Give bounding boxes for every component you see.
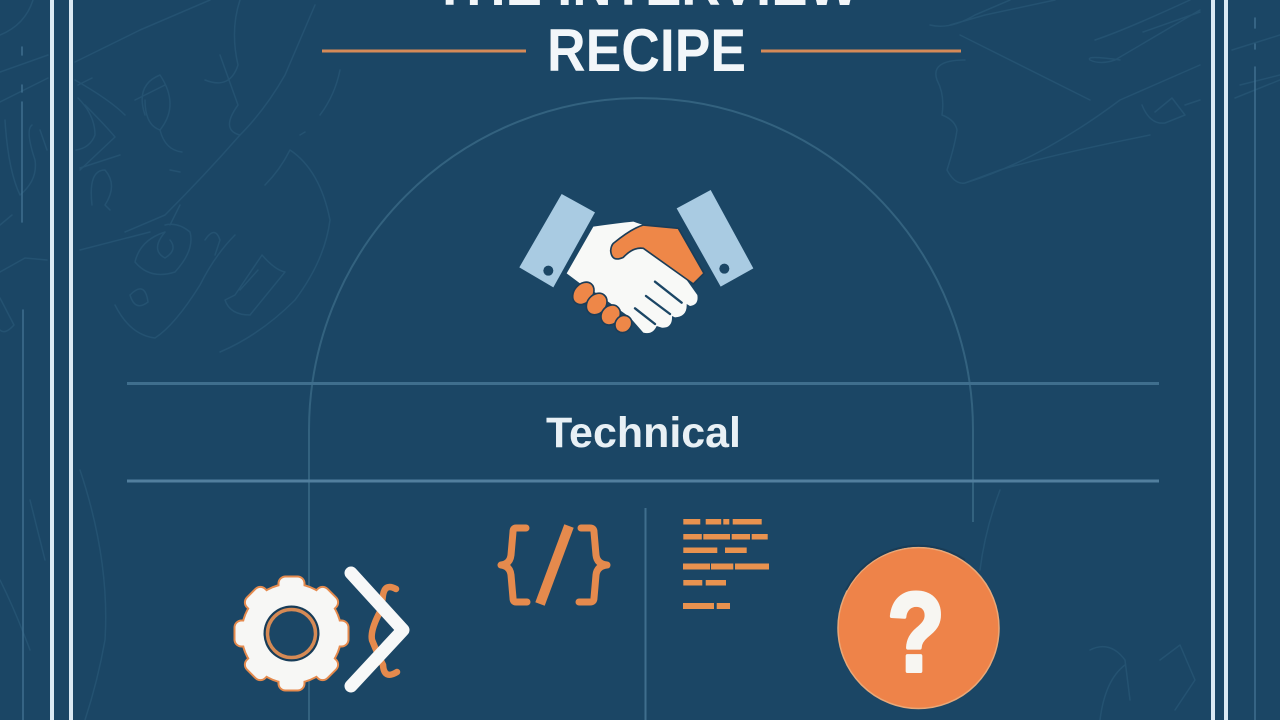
- icon: question mark circle: [838, 546, 999, 708]
- orange fingers: [568, 278, 635, 336]
- background arch: [309, 98, 973, 720]
- divider bottom: [127, 480, 1159, 482]
- left cuff: [519, 194, 595, 287]
- title: RECIPE: [547, 17, 746, 84]
- section heading: Technical: [546, 409, 741, 457]
- left dashed guide: [22, 47, 23, 720]
- icon: code lines: [683, 519, 769, 609]
- column divider: [644, 508, 646, 720]
- icon: gear: [236, 578, 348, 690]
- title rule: right: [761, 50, 961, 52]
- title rule: left: [322, 50, 526, 52]
- right dashed guide: [1254, 18, 1256, 720]
- icon: handshake: [519, 190, 753, 336]
- right cuff: [677, 190, 753, 287]
- divider top: [127, 382, 1159, 385]
- title: [433, 0, 859, 84]
- white hand: [567, 222, 698, 333]
- icon: code braces: [501, 526, 607, 604]
- icon: question mark circle: ?: [887, 569, 945, 695]
- orange hand: [611, 225, 704, 284]
- icon: orange brace behind chevron: [372, 587, 397, 675]
- icon: chevron: [351, 573, 403, 686]
